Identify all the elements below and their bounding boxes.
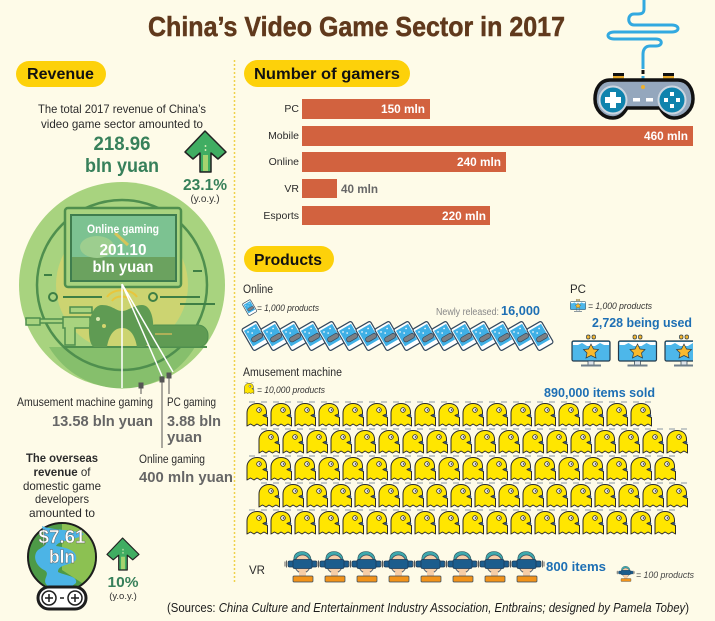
text: online gaming figure: 201.10 [100, 242, 146, 259]
divider [234, 60, 236, 582]
text: overseas amount [38, 526, 86, 567]
bar chart: number of gamers: Online [269, 156, 299, 168]
label: online gaming small [139, 454, 233, 486]
heading: Products: Products [254, 252, 322, 269]
label: PC gaming: 3.88 bln [167, 413, 221, 430]
bar chart: number of gamers: Esports [263, 210, 299, 222]
text: overseas amount: bln [49, 546, 75, 567]
bar chart: number of gamers: VR [284, 183, 299, 195]
legend: VR: = 100 products [636, 570, 694, 580]
label: PC gaming [167, 395, 221, 446]
text: PC being used: 2,728 being used [592, 315, 692, 330]
icons: amusement machine ghosts [247, 402, 688, 534]
text: overseas revenue: revenue of [34, 465, 91, 479]
label: online products: Online [243, 284, 273, 296]
label: PC products [570, 284, 652, 312]
bar chart: number of gamers [263, 99, 693, 225]
heading: Number of gamers: Number of gamers [254, 66, 400, 83]
text: overseas revenue: domestic game [23, 479, 101, 493]
text: newly released [436, 303, 540, 318]
text: growth 10%: (y.o.y.) [109, 591, 137, 602]
label: VR: VR [249, 565, 265, 577]
text: online gaming figure: Online gaming [87, 222, 159, 236]
text: online gaming figure [87, 222, 159, 276]
legend: VR [617, 566, 694, 582]
label: online products: = 1,000 products [257, 303, 319, 313]
text: overseas revenue: amounted to [29, 506, 95, 520]
text: revenue intro: The total 2017 revenue of China’s [38, 102, 206, 116]
heading: Number of gamers [244, 60, 410, 87]
title: China’s Video Game Sector in 2017 [148, 11, 565, 42]
label: online gaming small: 400 mln yuan [139, 469, 233, 486]
text: newly released: 16,000 [501, 303, 540, 318]
text: growth 23.1%: (y.o.y.) [190, 194, 220, 205]
text: total revenue: bln yuan [85, 156, 159, 177]
icons: monitors [571, 334, 693, 366]
text: overseas revenue: The overseas [26, 451, 98, 465]
text: revenue intro [38, 102, 206, 131]
label: online products [242, 284, 319, 316]
heading: Revenue [16, 61, 106, 87]
heading: Products [244, 246, 334, 272]
label: online gaming small: Online gaming [139, 454, 205, 466]
label lines [122, 284, 173, 388]
text: growth 23.1%: 23.1% [183, 177, 227, 194]
icon: game controller with cable [595, 0, 693, 118]
bar chart: number of gamers: 150 mln [381, 102, 425, 116]
icon: globe with controller [28, 523, 96, 609]
label: PC gaming: yuan [167, 429, 202, 446]
label: amusement machine products: Amusement machine [243, 367, 342, 379]
bar chart: number of gamers: 240 mln [457, 155, 501, 169]
icon: up arrow 10% [107, 538, 139, 570]
text: growth 23.1% [183, 177, 227, 205]
bar chart: number of gamers: 40 mln [341, 182, 378, 196]
text: overseas revenue [23, 451, 101, 520]
callout leaders [139, 373, 171, 448]
bar chart: number of gamers: Mobile [268, 130, 299, 142]
text: revenue intro: video game sector amounted to [41, 117, 203, 131]
icons: VR users [285, 552, 544, 582]
icons: phones [241, 321, 554, 351]
text: growth 10%: 10% [108, 575, 139, 591]
text: newly released: Newly released: [436, 307, 499, 318]
text: total revenue: 218.96 [94, 134, 150, 155]
label: amusement machine products [243, 367, 342, 395]
label: amusement machine products: = 10,000 products [257, 385, 325, 395]
text: overseas revenue: developers [35, 492, 89, 506]
text: overseas amount: $7.61 [38, 526, 86, 547]
label: amusement machine gaming [17, 395, 153, 430]
text: items sold: 890,000 items sold [544, 385, 655, 400]
label: PC products: PC [570, 284, 586, 296]
icon: up arrow 23.1% [185, 131, 226, 172]
illustration: online gaming circle [19, 182, 225, 388]
bar chart: number of gamers: 220 mln [442, 209, 486, 223]
label: PC gaming: PC gaming [167, 395, 216, 409]
label: PC products: = 1,000 products [588, 301, 652, 311]
label: amusement machine gaming: Amusement machine gaming [17, 395, 153, 409]
text: VR items: 800 items [546, 559, 606, 574]
bar chart: number of gamers: PC [284, 103, 299, 115]
bar chart: number of gamers: 460 mln [644, 129, 688, 143]
text: total revenue [85, 134, 159, 177]
label: amusement machine gaming: 13.58 bln yuan [52, 413, 153, 430]
text: growth 10% [108, 575, 139, 602]
heading: Revenue: Revenue [27, 66, 94, 83]
text: online gaming figure: bln yuan [92, 259, 154, 276]
